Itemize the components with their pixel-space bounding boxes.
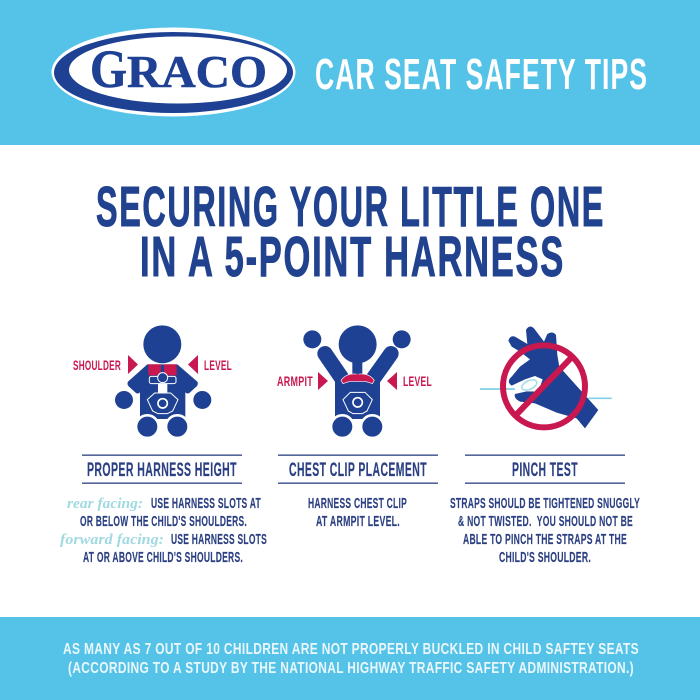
heading: pinch test: PINCH TEST [512,460,578,481]
panel: chest clip placement [277,325,438,530]
header band [0,0,700,145]
text block: harness height: rear facing: [67,496,143,512]
logo: Graco oval: G [90,39,127,99]
icon: child with chest clip at armpit level [277,325,432,438]
panel: pinch test [450,327,640,566]
text block: pinch test: CHILD'S SHOULDER. [499,550,591,566]
main heading [96,175,605,289]
text block: chest clip: HARNESS CHEST CLIP [308,496,407,512]
text block: chest clip [308,496,407,530]
text block: harness height: USE HARNESS SLOTS AT [151,496,261,512]
logo: Graco oval: RACO [127,46,267,97]
footer text [63,641,639,677]
label: shoulder: SHOULDER [73,357,121,373]
text block: chest clip: AT ARMPIT LEVEL. [316,514,400,530]
text block: harness height: forward facing: [60,532,164,548]
icon: child with harness at shoulder level [73,325,232,438]
arrow: left [318,372,328,390]
logo: Graco oval [52,28,296,116]
text block: harness height [60,496,267,566]
label: level: LEVEL [403,373,432,389]
panel: proper harness height [60,325,267,566]
arrow: left [128,355,138,374]
arrow: right [387,372,397,390]
footer band [0,617,700,700]
text block: pinch test [450,496,640,566]
heading: proper harness height: PROPER HARNESS HEIGHT [87,460,237,481]
label: armpit: ARMPIT [277,373,313,389]
text block: harness height: OR BELOW THE CHILD'S SHOULDERS. [80,514,247,530]
icon: crossed-out pinching hand [480,327,612,428]
text block: harness height: USE HARNESS SLOTS [171,532,267,548]
arrow: right [188,355,198,374]
heading: chest clip placement: CHEST CLIP PLACEMENT [289,460,427,481]
label: level: LEVEL [204,357,232,373]
text block: harness height: AT OR ABOVE CHILD'S SHOULDERS. [83,550,243,566]
